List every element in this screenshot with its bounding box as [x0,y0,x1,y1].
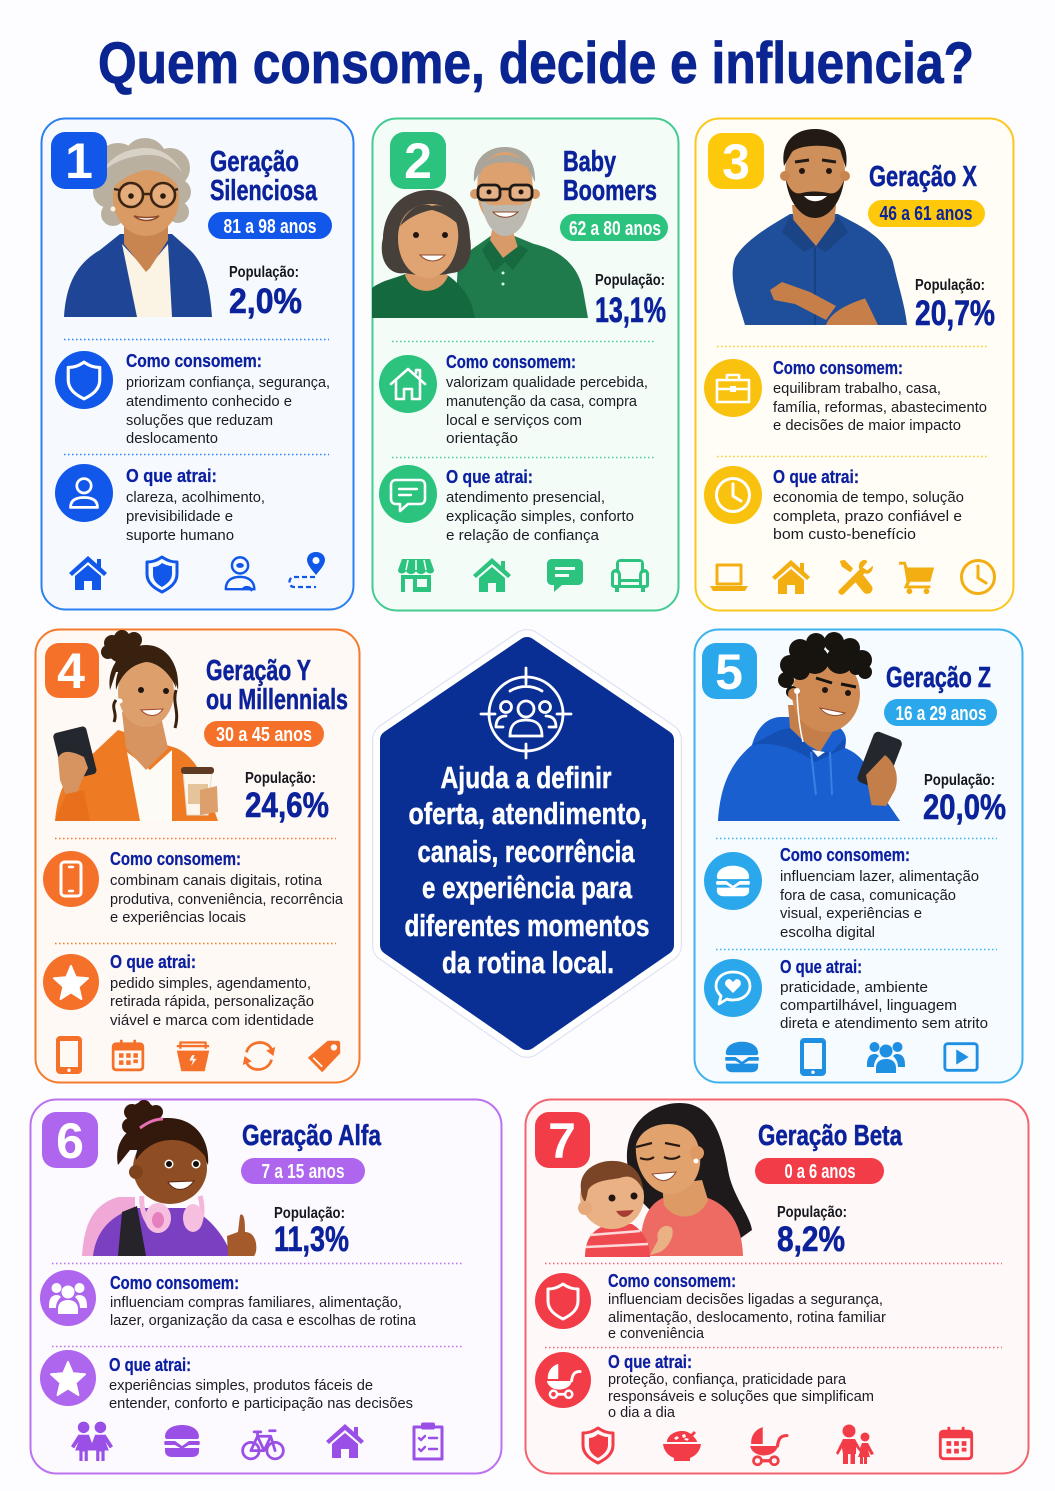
population: População: [274,1205,345,1222]
block: como consomem: atendimento conhecido e [126,393,292,410]
block: o que atrai: O que atrai: [126,466,217,486]
icon: store [398,559,434,592]
icon: tag [308,1041,340,1072]
age pill: 81 a 98 anos [224,216,316,238]
icon: stroller [750,1427,787,1465]
population [229,264,302,321]
portrait: man with crossed arms [733,129,907,325]
number badge 3 [708,133,764,190]
block: o que atrai: economia de tempo, solução [773,489,964,506]
block: como consomem: influenciam decisões ligadas a segurança, [608,1291,883,1308]
number badge 1: 1 [65,133,93,189]
block: como consomem: orientação [446,430,518,447]
panel: 3 Geração X [696,118,1014,610]
icon: cart [899,562,934,594]
population [923,772,1006,827]
icon: bowl [663,1431,701,1461]
block: como consomem: soluções que reduzam [126,412,273,429]
icon: home [473,558,511,592]
population: 8,2% [777,1220,845,1259]
block: como consomem: e experiências locais [110,909,246,926]
block: o que atrai: pedido simples, agendamento, [110,975,311,992]
population: 24,6% [245,786,329,825]
block: como consomem: alimentação, deslocamento, rotina familiar [608,1309,886,1326]
number badge 6 [42,1112,98,1169]
block: o que atrai: O que atrai: [109,1355,191,1375]
population [915,277,995,333]
heading [210,146,318,207]
age pill [755,1158,884,1184]
heading [206,655,348,716]
icon: home [326,1424,364,1458]
icon: armchair [611,559,649,592]
icon: home [772,560,810,594]
icon: family [836,1424,874,1464]
age pill: 7 a 15 anos [262,1161,344,1183]
panel: 6 Geração Alfa [30,1100,502,1474]
statement text: e experiência para [422,870,633,905]
icon row [398,558,649,592]
icon: star [43,954,99,1010]
block: o que atrai: retirada rápida, personalização [110,993,314,1010]
heading: Boomers [563,175,657,207]
portrait: woman with phone and coffee [52,630,218,821]
icon: people [40,1270,96,1326]
panel: 2 Baby Boomers [372,118,678,610]
block: o que atrai: explicação simples, conforto [446,508,634,525]
population: 2,0% [229,282,302,321]
block: o que atrai: completa, prazo confiável e [773,508,962,525]
population [595,272,666,330]
portrait: mother and baby [578,1103,752,1257]
block: o que atrai: praticidade, ambiente [780,979,928,996]
block: como consomem [608,1271,886,1342]
block: o que atrai: clareza, acolhimento, [126,489,265,506]
icon: shield [147,557,177,592]
heading: Geração Y [206,655,311,687]
block: como consomem: local e serviços com [446,412,582,429]
number badge 2 [390,132,446,189]
block: o que atrai: proteção, confiança, praticidade para [608,1371,847,1388]
population [777,1204,847,1259]
population [274,1205,349,1259]
block: o que atrai [446,467,634,544]
block: como consomem: Como consomem: [446,352,576,372]
age pill [560,214,668,241]
icon: bike [243,1431,283,1459]
block: o que atrai: O que atrai: [780,957,862,977]
block: o que atrai: o dia a dia [608,1404,676,1421]
icon: burger [164,1425,200,1457]
age pill: 0 a 6 anos [784,1161,856,1183]
age pill: 62 a 80 anos [569,218,661,240]
statement text: diferentes momentos [404,908,650,943]
population: População: [595,272,665,289]
panel: 5 Geração Z [694,630,1022,1082]
heading: Geração Beta [758,1120,903,1152]
icon: kids [71,1422,113,1461]
population: População: [229,264,299,281]
block: como consomem: e conveniência [608,1325,705,1342]
block: o que atrai: entender, conforto e participação nas decisões [109,1395,413,1412]
block: o que atrai [110,952,314,1029]
block: o que atrai: compartilhável, linguagem [780,997,957,1014]
block: como consomem: combinam canais digitais, rotina [110,872,323,889]
number badge 4 [45,643,99,699]
block: como consomem: e decisões de maior impacto [773,417,961,434]
age pill: 46 a 61 anos [880,203,972,225]
number badge 7 [535,1112,590,1169]
icon: support [226,557,254,590]
block: como consomem: Como consomem: [126,351,262,371]
icon: shield [535,1273,591,1329]
center hexagon [390,647,664,1040]
icon: clock [962,560,994,594]
block: como consomem: escolha digital [780,924,875,941]
icon: home [69,556,107,590]
block: o que atrai [126,466,265,544]
icon: calendar [939,1427,973,1460]
icon row [725,1038,977,1076]
number badge 3: 3 [722,134,750,190]
block: o que atrai: experiências simples, produtos fáceis de [109,1377,373,1394]
number badge 6: 6 [56,1113,84,1169]
block: como consomem: deslocamento [126,430,218,447]
block: como consomem: Como consomem: [780,845,910,865]
block: como consomem: fora de casa, comunicação [780,887,956,904]
icon: burger [725,1042,759,1072]
block: como consomem [110,849,344,926]
age pill: 30 a 45 anos [216,724,312,746]
number badge 7: 7 [548,1113,576,1169]
age pill [884,699,997,726]
portrait: girl with backpack and headphones [82,1100,256,1256]
icon: heart chat [704,959,762,1017]
icon: chat [379,465,437,523]
icon: laptop [710,565,748,591]
heading: Geração X [869,161,977,193]
icon: clock [704,466,762,524]
statement text: oferta, atendimento, [408,796,648,831]
portrait: elderly woman [64,138,212,317]
block: o que atrai: O que atrai: [773,467,859,487]
block: como consomem: Como consomem: [110,849,241,869]
icon: calendar [112,1040,144,1071]
block: o que atrai: previsibilidade e [126,508,233,525]
block: como consomem: família, reformas, abastecimento [773,399,987,416]
icon: people [867,1042,905,1073]
icon row [71,1422,442,1461]
block: como consomem [780,845,979,941]
block: como consomem: Como consomem: [773,358,903,378]
icon: chat [547,559,583,592]
population [245,770,329,825]
block: o que atrai: viável e marca com identidade [110,1012,314,1029]
block: como consomem: influenciam lazer, alimentação [780,868,979,885]
population: População: [777,1204,847,1221]
icon: shield [55,351,113,409]
panel: 1 Geração Silenciosa [42,118,354,610]
block: como consomem: manutenção da casa, compra [446,393,638,410]
statement text: Ajuda a definir [440,760,612,795]
block: o que atrai: O que atrai: [446,467,533,487]
population: 11,3% [274,1220,349,1259]
block: como consomem: influenciam compras familiares, alimentação, [110,1294,402,1311]
statement text: da rotina local. [442,945,614,980]
icon: route [290,552,325,587]
icon: phone [800,1038,826,1076]
number badge 5: 5 [715,644,743,700]
block: o que atrai [780,957,988,1032]
block: o que atrai [109,1355,413,1412]
population: 20,7% [915,294,995,333]
icon: video [945,1044,977,1070]
block: como consomem: valorizam qualidade percebida, [446,374,648,391]
icon: burger [704,852,762,910]
icon: shield [583,1428,613,1463]
icon: phone [56,1036,82,1074]
block: o que atrai: e relação de confiança [446,527,600,544]
block: como consomem: Como consomem: [608,1271,736,1291]
icon: tools [838,560,873,595]
population: 13,1% [595,291,666,330]
block: o que atrai: O que atrai: [110,952,196,972]
icon: refresh [243,1042,275,1070]
statement text [404,760,650,980]
statement text: canais, recorrência [418,834,635,869]
icon: briefcase [704,359,762,417]
icon row [710,560,994,595]
block: o que atrai [773,467,964,543]
heading: Silenciosa [210,175,318,207]
block: o que atrai [608,1352,874,1421]
population: População: [245,770,316,787]
block: como consomem [110,1273,417,1329]
panel: 4 Geração Y [36,630,360,1082]
icon: star [40,1350,96,1406]
heading: Baby [563,146,616,178]
icon: phone [43,851,99,907]
icon: clipboard [414,1422,442,1459]
block: como consomem [773,358,987,434]
population: População: [924,772,995,789]
icon row [56,1036,340,1074]
population: População: [915,277,985,294]
block: o que atrai: direta e atendimento sem atrito [780,1015,988,1032]
icon: stroller [535,1352,591,1408]
number badge 2: 2 [404,133,432,189]
portrait: older couple [372,147,588,318]
block: o que atrai: atendimento presencial, [446,489,605,506]
block: o que atrai: suporte humano [126,527,234,544]
icon: house outline [379,355,437,413]
heading [563,146,657,207]
icon: person [55,464,113,522]
age pill [868,200,985,227]
block: como consomem [446,352,648,447]
block: como consomem [126,351,330,447]
block: como consomem: priorizam confiança, segurança, [126,374,330,391]
number badge 5 [702,643,757,700]
icon row [69,552,325,592]
panel: 7 Geração Beta [526,1100,1028,1474]
population: 20,0% [923,788,1006,827]
number badge 4: 4 [57,643,85,699]
icon: lunch box [177,1042,209,1071]
heading: ou Millennials [206,684,348,716]
age pill [241,1158,365,1184]
block: o que atrai: responsáveis e soluções que simplificam [608,1388,874,1405]
age pill: 16 a 29 anos [896,703,986,725]
icon row [583,1424,973,1465]
block: como consomem: produtiva, conveniência, recorrência [110,891,344,908]
block: o que atrai: O que atrai: [608,1352,692,1372]
heading: Geração [210,146,299,178]
heading: Geração Z [886,662,991,694]
age pill [208,212,332,239]
icon: target audience [481,668,571,758]
block: como consomem: Como consomem: [110,1273,239,1293]
block: como consomem: lazer, organização da casa e escolhas de rotina [110,1312,417,1329]
block: como consomem: equilibram trabalho, casa, [773,380,941,397]
heading: Geração Alfa [242,1120,382,1152]
block: como consomem: visual, experiências e [780,905,922,922]
block: o que atrai: bom custo-benefício [773,526,916,543]
number badge 1 [51,132,107,189]
portrait: young man with hoodie [718,632,903,821]
